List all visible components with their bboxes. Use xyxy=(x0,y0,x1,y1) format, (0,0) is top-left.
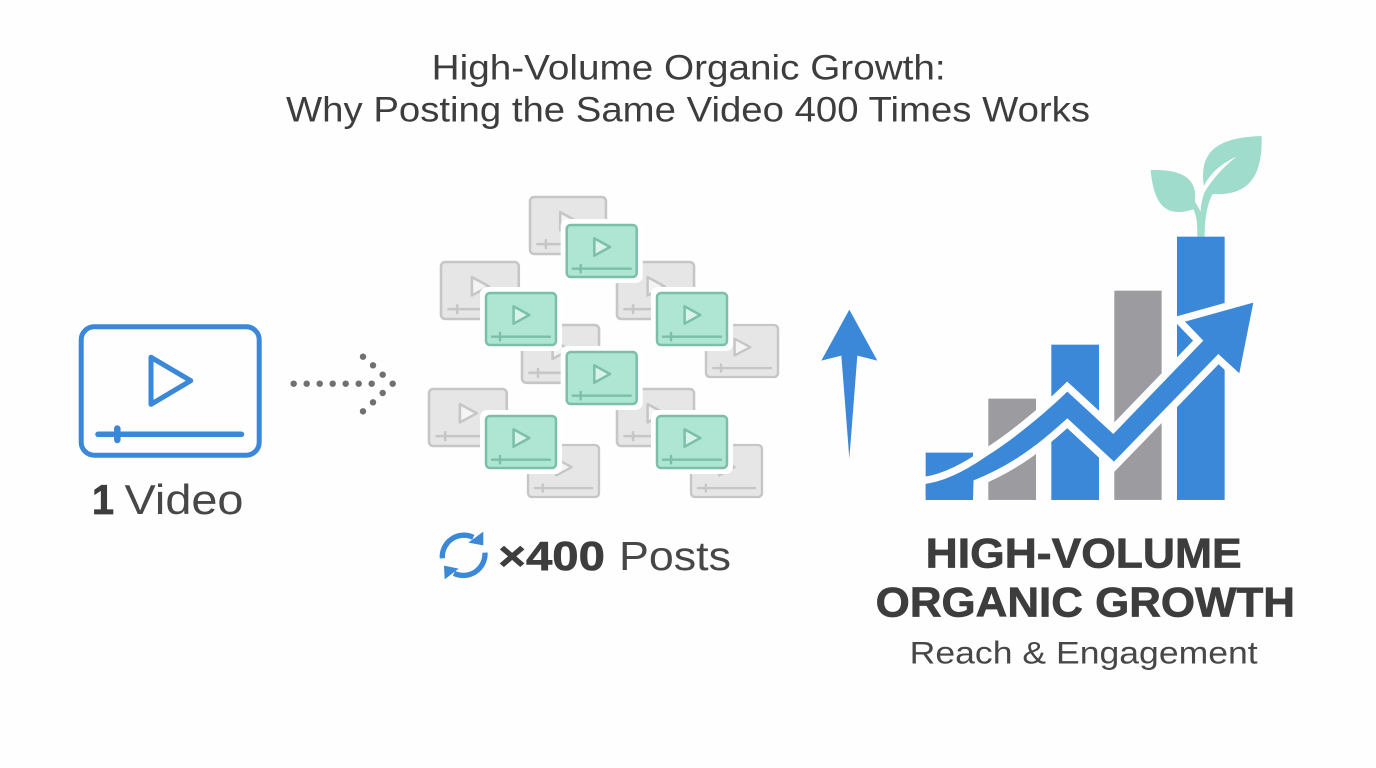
icon: refresh arrows xyxy=(442,532,485,579)
green video card 4 xyxy=(561,346,643,410)
grey video card 9 xyxy=(691,445,762,497)
title xyxy=(286,48,1090,130)
green video card 1 xyxy=(561,219,643,283)
cluster: repeated video posts xyxy=(429,197,778,497)
green video card 3 xyxy=(651,287,733,351)
grey video card 1 xyxy=(530,197,606,254)
grey video card 7 xyxy=(617,389,694,446)
arrow: upward blue arrow xyxy=(821,310,877,458)
title: High-Volume Organic Growth: xyxy=(432,48,946,87)
heading: high-volume organic growth: ORGANIC GROWTH xyxy=(876,579,1295,626)
green video card 5 xyxy=(480,410,562,474)
grey video card 3 xyxy=(617,262,694,319)
bar chart with rising arrow xyxy=(926,136,1262,500)
label: 1 Video: Video xyxy=(124,476,244,523)
subheading: reach and engagement: Reach & Engagement xyxy=(910,634,1258,670)
icon: single video player xyxy=(81,327,259,455)
label: x400 Posts xyxy=(498,533,731,579)
grey video card 6 xyxy=(429,389,507,446)
label: x400 Posts: Posts xyxy=(619,533,731,579)
arrow: dotted right arrow xyxy=(290,354,396,414)
grey video card 4 xyxy=(522,325,599,383)
title: Why Posting the Same Video 400 Times Works xyxy=(286,91,1090,130)
green video card 6 xyxy=(651,410,733,474)
grey video card 8 xyxy=(528,445,599,497)
label: x400 Posts: ×400 xyxy=(498,533,605,579)
grey video card 5 xyxy=(706,325,778,377)
grey video card 2 xyxy=(441,262,519,319)
heading: high-volume organic growth: HIGH-VOLUME xyxy=(926,530,1242,577)
first bar lower section xyxy=(926,465,974,500)
green video card 2 xyxy=(480,287,562,351)
chart bars xyxy=(926,237,1225,500)
arrow: rising trend xyxy=(926,303,1253,497)
heading: high-volume organic growth xyxy=(876,530,1295,626)
icon: sprout xyxy=(1151,136,1262,237)
label: 1 Video: 1 xyxy=(92,476,114,523)
